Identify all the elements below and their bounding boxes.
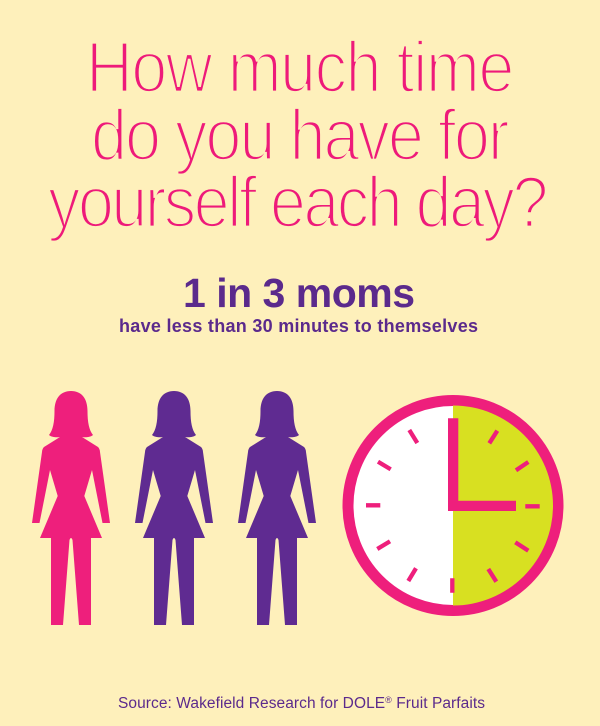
clock half-hour wedge bbox=[453, 406, 553, 606]
clock tick marks bbox=[366, 430, 540, 593]
clock face bbox=[348, 400, 558, 610]
clock hands bbox=[448, 418, 516, 511]
title: How much time bbox=[86, 27, 514, 108]
source: Source: Wakefield Research for DOLE bbox=[118, 695, 385, 712]
icon: purple woman 1 bbox=[135, 391, 213, 625]
title bbox=[48, 27, 548, 243]
subheading: have less than 30 minutes to themselves bbox=[119, 316, 478, 336]
source: ® bbox=[385, 695, 392, 705]
source: Fruit Parfaits bbox=[392, 695, 485, 712]
title: do you have for bbox=[91, 95, 510, 176]
headline: 1 in 3 moms: 1 in 3 moms bbox=[183, 270, 415, 316]
clock bbox=[348, 400, 558, 610]
icon: purple woman 2 bbox=[238, 391, 316, 625]
icon: pink woman bbox=[32, 391, 110, 625]
title: yourself each day? bbox=[48, 162, 548, 243]
figures: three women bbox=[32, 391, 316, 625]
